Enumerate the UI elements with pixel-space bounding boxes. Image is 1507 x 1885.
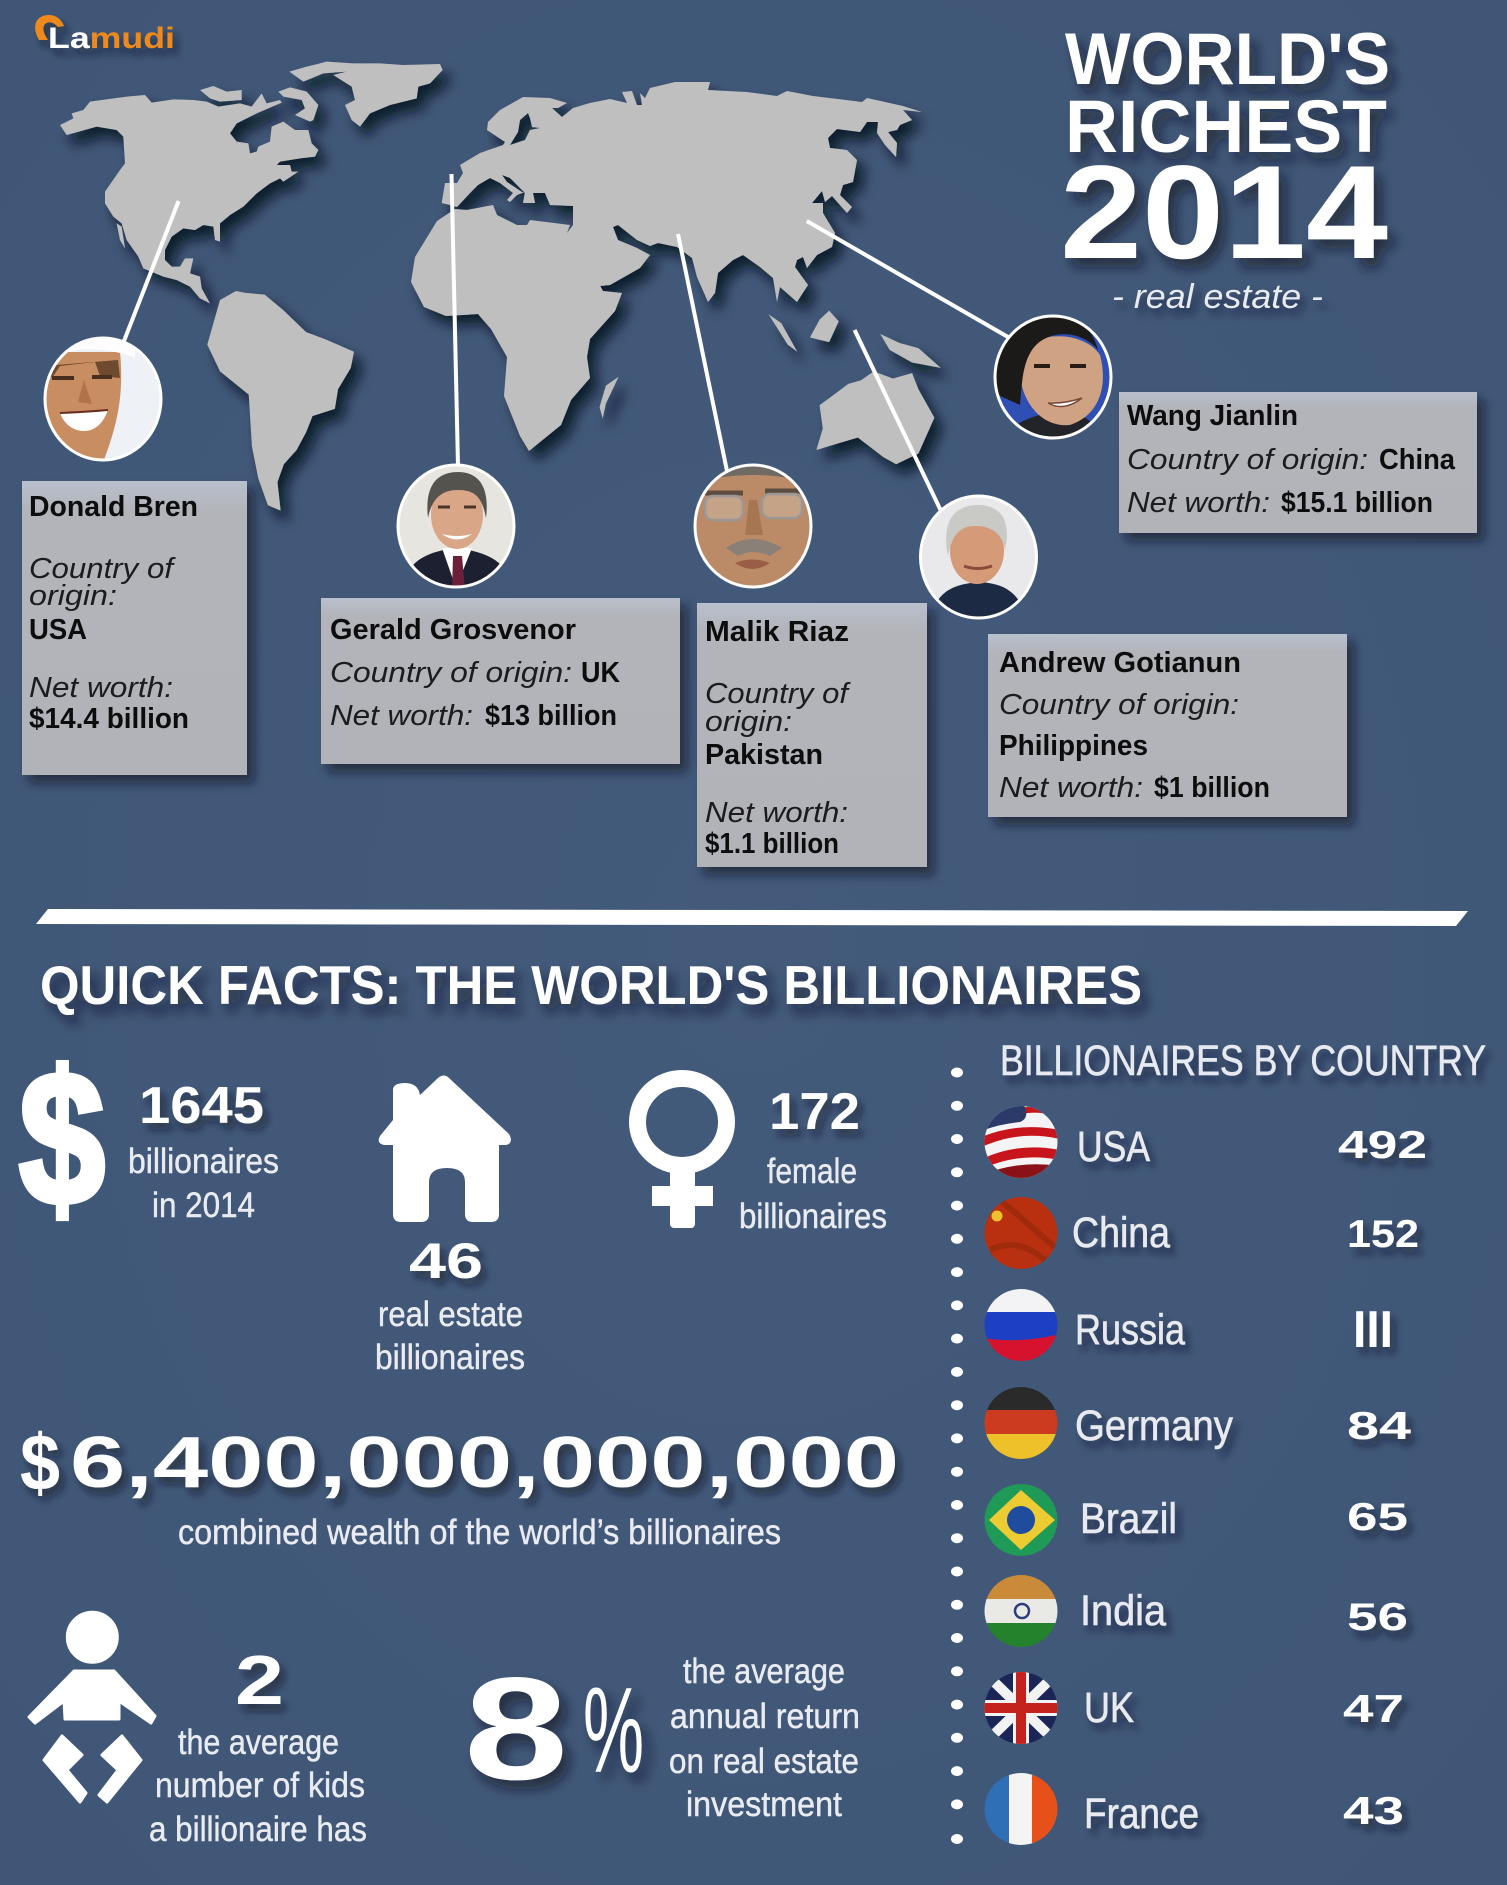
stat: combined wealth — [20, 1418, 899, 1552]
connector lines from map to portraits — [124, 174, 1008, 511]
info card: Wang Jianlin: China — [1379, 444, 1456, 476]
info card: Andrew Gotianun: $1 billion — [1154, 772, 1270, 804]
label: average number of kids: a billionaire has — [149, 1810, 367, 1849]
label: USA: USA — [1077, 1123, 1150, 1171]
row: USA — [984, 1105, 1427, 1180]
portrait: Gerald Grosvenor — [395, 462, 520, 592]
label: Germany: Germany — [1075, 1402, 1233, 1450]
panel: billionaires by country — [984, 1037, 1486, 1845]
label: India: India — [1080, 1587, 1166, 1635]
subtitle: real estate: - real estate - — [1112, 278, 1323, 316]
map: Arctic island — [200, 86, 242, 102]
info card: Malik Riaz — [697, 603, 927, 867]
label: average number of kids: number of kids — [155, 1766, 365, 1805]
title: World's Richest 2014 — [1060, 19, 1390, 287]
stat: 2 kids — [29, 1612, 367, 1849]
value: 47: 47 — [1343, 1688, 1404, 1731]
map: North America — [60, 93, 318, 303]
info card: Donald Bren — [22, 481, 247, 775]
line: Malik Riaz — [678, 234, 727, 471]
portrait: Donald Bren — [44, 336, 162, 462]
value: 65: 65 — [1347, 1496, 1408, 1539]
label: billionaires in 2014: billionaires — [128, 1142, 279, 1181]
label: real estate billionaires: billionaires — [375, 1338, 525, 1377]
label: France: France — [1084, 1790, 1199, 1838]
logo: Lamudi — [35, 15, 175, 55]
info card: Malik Riaz: Net worth: — [705, 797, 848, 829]
label: real estate billionaires: real estate — [378, 1295, 523, 1334]
map: Madagascar — [600, 377, 619, 419]
info card: Donald Bren: Net worth: — [29, 672, 173, 704]
stat: 46 real estate billionaires — [375, 1076, 525, 1377]
row: India — [984, 1575, 1408, 1649]
icon: baby — [29, 1612, 155, 1802]
icon: dollar sign: $ — [19, 1033, 105, 1245]
number: $6,400,000,000,000: $ — [20, 1418, 60, 1507]
map: Eurasia — [442, 82, 922, 302]
info card: Andrew Gotianun: Net worth: — [999, 772, 1143, 804]
heading: quick facts: QUICK FACTS: THE WORLD'S BILLIONAIRES — [40, 954, 1142, 1016]
label: average number of kids — [149, 1723, 367, 1849]
info card: Andrew Gotianun — [988, 634, 1347, 817]
row: UK — [984, 1672, 1404, 1744]
info card: Donald Bren: $14.4 billion — [29, 703, 189, 735]
label: UK: UK — [1084, 1684, 1134, 1732]
info card: Donald Bren: origin: — [29, 580, 117, 612]
map: Baffin Island — [278, 87, 318, 122]
number: $6,400,000,000,000: 6,400,000,000,000 — [70, 1423, 899, 1503]
info card: Gerald Grosvenor: Gerald Grosvenor — [330, 614, 576, 646]
info card: Malik Riaz: Country of — [705, 678, 851, 710]
value: 56: 56 — [1347, 1596, 1408, 1639]
info card: Gerald Grosvenor: Net worth: — [330, 700, 473, 732]
icon: house — [379, 1076, 511, 1222]
row: China — [984, 1196, 1419, 1271]
portrait: Malik Riaz — [690, 462, 815, 592]
map: Australia — [816, 371, 934, 464]
row: Russia — [984, 1288, 1393, 1362]
label: female billionaires: billionaires — [739, 1197, 887, 1236]
label: female billionaires: female — [767, 1152, 857, 1191]
info card: Andrew Gotianun: Country of origin: — [999, 689, 1239, 721]
info card: Wang Jianlin: Net worth: — [1127, 487, 1270, 519]
label: billionaires in 2014 — [128, 1142, 279, 1225]
info card: Malik Riaz: origin: — [705, 706, 792, 738]
info card: Andrew Gotianun: Andrew Gotianun — [999, 647, 1241, 679]
info card: Donald Bren: Country of — [29, 553, 176, 585]
title: World's Richest 2014: RICHEST — [1065, 85, 1387, 168]
portrait: Andrew Gotianun — [915, 493, 1040, 623]
label: billionaires in 2014: in 2014 — [152, 1186, 255, 1225]
number: $6,400,000,000,000 — [20, 1418, 899, 1507]
line: Andrew Gotianun — [855, 330, 941, 511]
map: Baja California — [117, 223, 125, 248]
flag: India — [984, 1575, 1059, 1649]
info card: Wang Jianlin — [1119, 392, 1477, 533]
number: 8%: % — [583, 1662, 644, 1798]
row: France — [984, 1773, 1404, 1845]
label: annual return: investment — [686, 1785, 842, 1824]
flag: Russia — [984, 1288, 1060, 1362]
label: Russia: Russia — [1075, 1306, 1185, 1354]
label: annual return: the average — [683, 1652, 845, 1691]
row: Germany — [984, 1386, 1411, 1460]
label: China: China — [1072, 1209, 1170, 1257]
flag: UK — [984, 1672, 1059, 1744]
info card: Gerald Grosvenor: Country of origin: — [330, 657, 572, 689]
info card: Gerald Grosvenor: $13 billion — [485, 700, 617, 732]
line: Gerald Grosvenor — [452, 174, 458, 466]
label: annual return — [669, 1652, 860, 1824]
map: South America — [207, 291, 354, 511]
label: Brazil: Brazil — [1080, 1495, 1177, 1543]
flag: China — [984, 1196, 1059, 1271]
map: New Guinea — [880, 334, 941, 368]
number: 2: 2 — [235, 1641, 284, 1719]
value: 84: 84 — [1347, 1405, 1411, 1448]
info card: Gerald Grosvenor — [321, 598, 680, 764]
number: 8% — [464, 1647, 644, 1810]
flag: Germany — [984, 1386, 1059, 1460]
line: Wang Jianlin — [807, 221, 1008, 337]
label: average number of kids: the average — [178, 1723, 339, 1762]
map: Borneo — [810, 311, 839, 342]
map: Africa — [411, 205, 622, 451]
info card: Andrew Gotianun: Philippines — [999, 730, 1148, 762]
info card: Malik Riaz: $1.1 billion — [705, 828, 839, 860]
label: combined wealth: combined wealth of the world’s billionaires — [178, 1513, 781, 1552]
number: 8%: 8 — [464, 1647, 568, 1810]
divider bar — [36, 909, 1468, 926]
flag: France — [984, 1773, 1059, 1845]
flag: USA — [984, 1105, 1060, 1180]
title: World's Richest 2014: 2014 — [1060, 139, 1388, 287]
world map — [60, 62, 941, 511]
logo: Lamudi: Lamudi — [48, 22, 175, 55]
line: Donald Bren — [124, 201, 179, 341]
info card: Wang Jianlin: $15.1 billion — [1281, 487, 1433, 519]
info card: Donald Bren: USA — [29, 614, 87, 646]
stat: 172 female billionaires — [638, 1078, 887, 1236]
label: real estate billionaires — [375, 1295, 525, 1377]
number: 46: 46 — [409, 1233, 483, 1289]
info card: Malik Riaz: Malik Riaz — [705, 616, 849, 648]
value: 43: 43 — [1343, 1790, 1404, 1833]
number: 1645: 1645 — [139, 1077, 264, 1135]
number: 172: 172 — [769, 1083, 860, 1141]
portrait: Wang Jianlin — [990, 313, 1115, 443]
dotted vertical separator — [951, 1068, 963, 1844]
stat: 8% return — [464, 1647, 860, 1824]
info card: Wang Jianlin: Country of origin: — [1127, 444, 1368, 476]
title: World's Richest 2014: WORLD'S — [1065, 19, 1390, 100]
map: Greenland — [289, 62, 443, 127]
row: Brazil — [984, 1484, 1408, 1556]
info card: Malik Riaz: Pakistan — [705, 739, 823, 771]
map: Sumatra — [769, 314, 797, 352]
value: 492: 492 — [1338, 1124, 1427, 1167]
label: annual return: on real estate — [669, 1742, 859, 1781]
value: 111: III — [1353, 1301, 1393, 1359]
value: 152: 152 — [1347, 1213, 1419, 1256]
label: annual return: annual return — [670, 1697, 860, 1736]
info card: Donald Bren: Donald Bren — [29, 491, 198, 523]
icon: female symbol — [638, 1078, 726, 1228]
label: female billionaires — [739, 1152, 887, 1236]
flag: Brazil — [984, 1484, 1059, 1556]
info card: Wang Jianlin: Wang Jianlin — [1127, 400, 1298, 432]
info card: Gerald Grosvenor: UK — [581, 657, 620, 689]
stat: 1645 billionaires — [19, 1033, 279, 1245]
